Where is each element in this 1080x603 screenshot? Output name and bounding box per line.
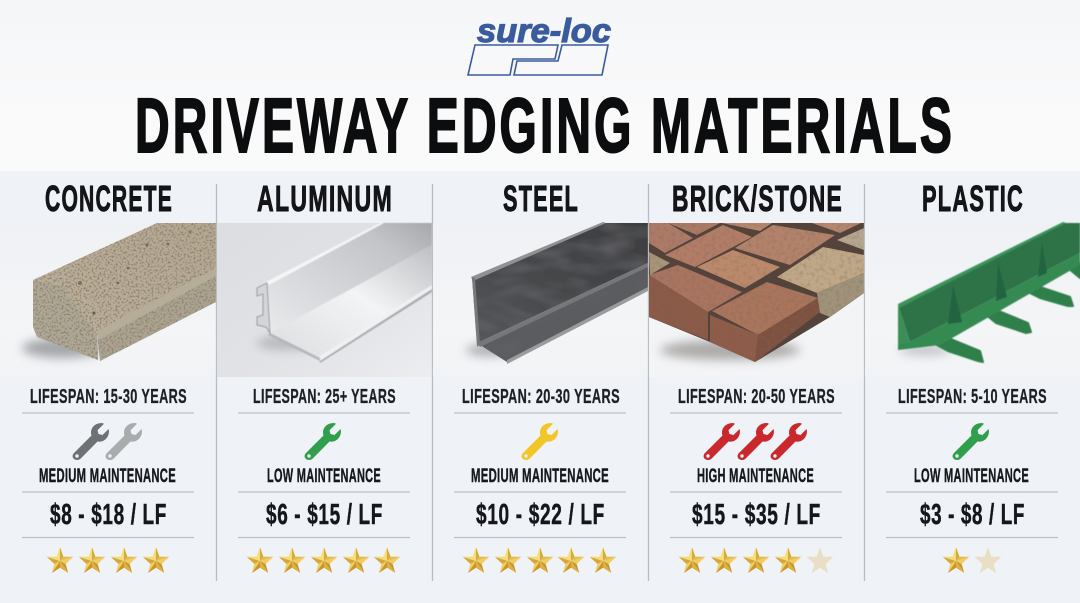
- rating stars: [679, 547, 833, 573]
- image: aluminum edging: [217, 222, 432, 377]
- image: concrete curb: [0, 223, 216, 377]
- rating stars: [47, 547, 169, 573]
- heading: concrete: CONCRETE: [45, 178, 173, 219]
- panel: brick/stone: [649, 178, 864, 573]
- panel: plastic: [865, 178, 1080, 573]
- rating stars: [463, 547, 616, 573]
- heading: brick/stone: BRICK/STONE: [672, 178, 843, 219]
- heading: aluminum: ALUMINUM: [257, 178, 393, 219]
- image: steel angle: [433, 222, 648, 377]
- lifespan: LIFESPAN: 20-30 YEARS: [462, 386, 620, 408]
- panel: steel: [433, 178, 648, 573]
- logo: sure-loc: sure-loc: [477, 12, 611, 49]
- icon: maintenance wrenches: [704, 423, 807, 460]
- icon: maintenance wrenches: [73, 423, 142, 460]
- logo: sure-loc: [468, 12, 611, 75]
- maintenance label: MEDIUM MAINTENANCE: [471, 466, 609, 487]
- maintenance label: MEDIUM MAINTENANCE: [39, 466, 176, 487]
- icon: maintenance wrench: [305, 423, 341, 460]
- header background: [0, 0, 1080, 171]
- price: $6 - $15 / LF: [266, 499, 383, 531]
- maintenance label: HIGH MAINTENANCE: [697, 466, 814, 487]
- price: $3 - $8 / LF: [920, 499, 1025, 531]
- price: $15 - $35 / LF: [692, 499, 821, 531]
- lifespan: LIFESPAN: 15-30 YEARS: [30, 386, 187, 408]
- image: plastic edging: [865, 222, 1080, 377]
- lifespan: LIFESPAN: 20-50 YEARS: [678, 386, 835, 408]
- price: $10 - $22 / LF: [476, 499, 605, 531]
- rating stars: [247, 547, 400, 573]
- icon: maintenance wrench: [522, 423, 558, 460]
- rating stars: [943, 547, 1001, 573]
- price: $8 - $18 / LF: [50, 499, 167, 531]
- heading: steel: STEEL: [503, 178, 579, 219]
- lifespan: LIFESPAN: 25+ YEARS: [253, 386, 396, 408]
- maintenance label: LOW MAINTENANCE: [267, 466, 381, 487]
- icon: maintenance wrench: [953, 423, 989, 460]
- panel: aluminum: [217, 178, 432, 573]
- image: brick pavers: [649, 223, 864, 377]
- panel: concrete: [0, 178, 216, 573]
